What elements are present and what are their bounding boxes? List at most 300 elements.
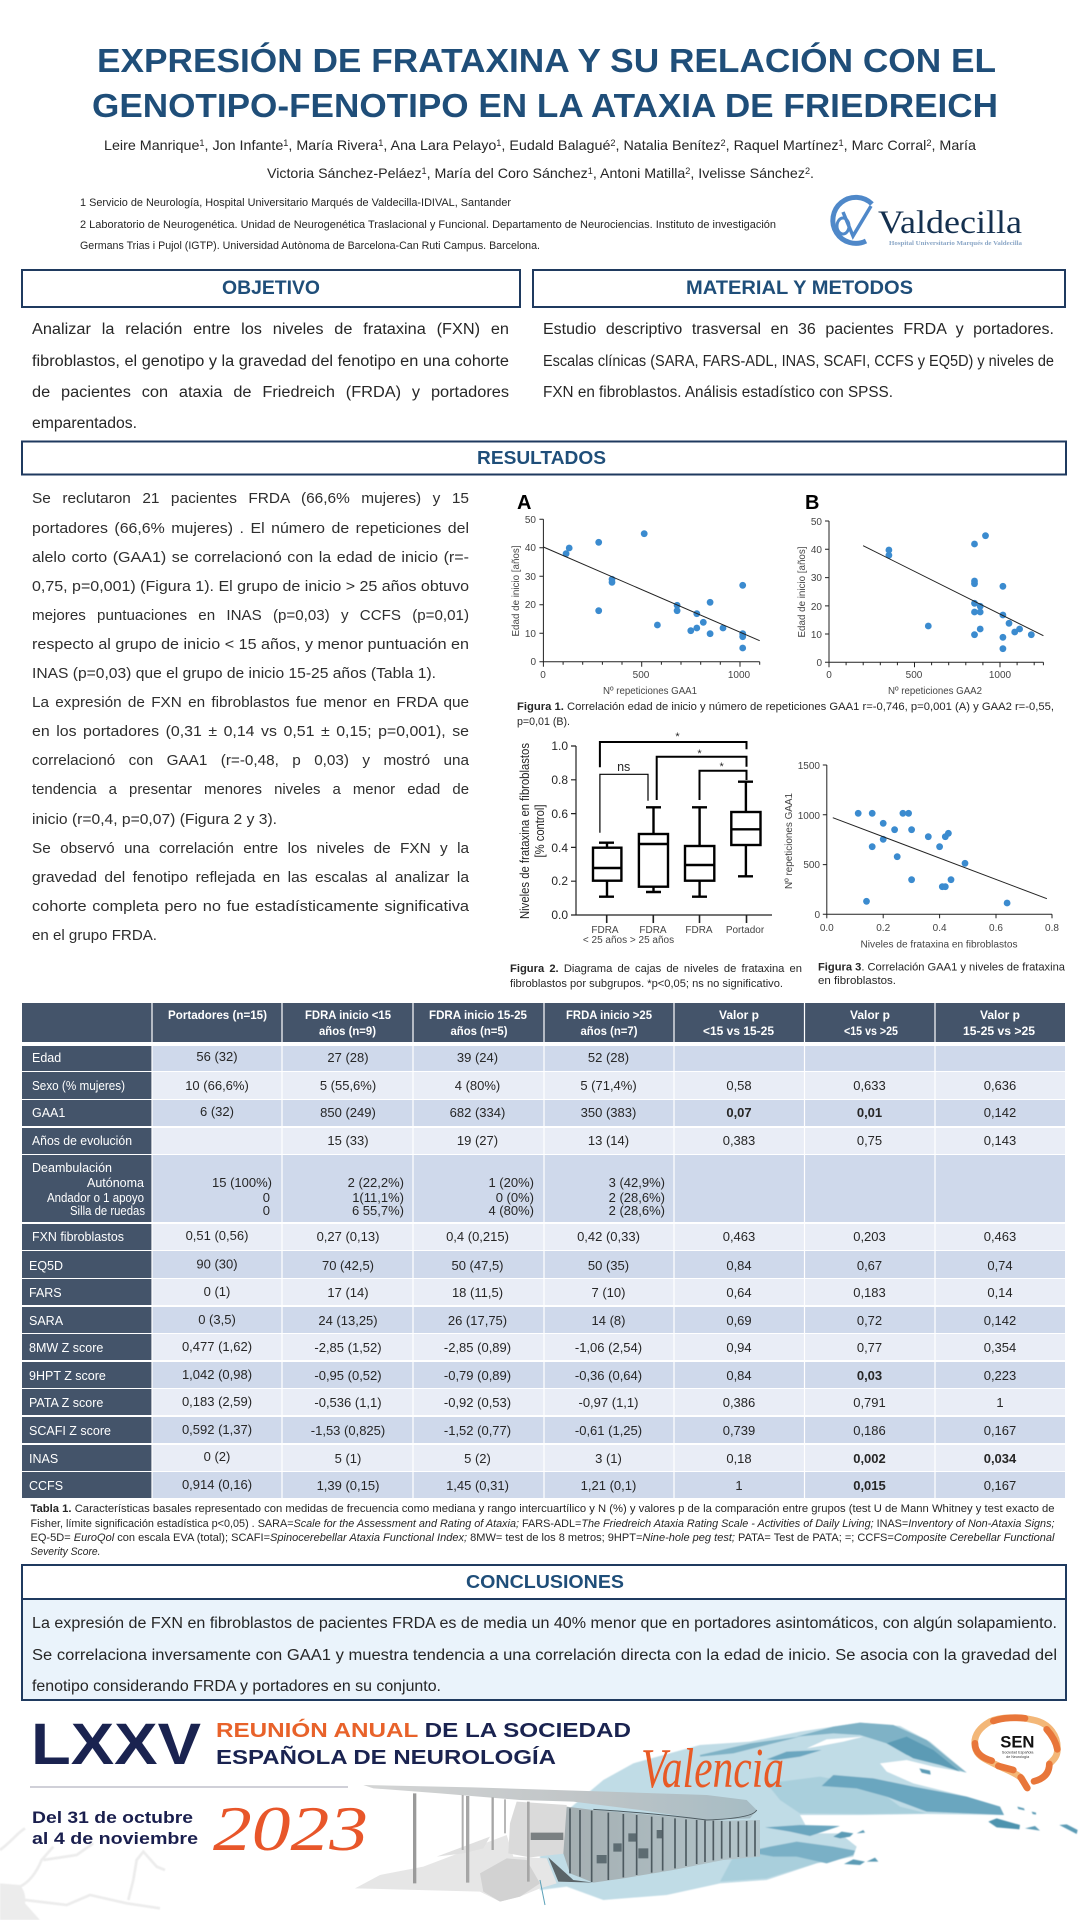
footer: meeting name: REUNIÓN ANUAL DE LA SOCIEDAD (216, 1718, 631, 1742)
row: FARS: 17 (14) (327, 1285, 369, 1300)
row: Deambulación: Autónoma (87, 1176, 144, 1190)
row: INAS: 5 (1) (335, 1451, 361, 1466)
caption: figure 1: Figura 1. Correlación edad de inicio y número de repeticiones GAA1 r=-0,746, p=0,001 (A) y GAA2 r=-0,55, (517, 701, 1054, 713)
footer: meeting name: ESPAÑOLA DE NEUROLOGÍA (216, 1746, 556, 1769)
row: EQ5D: 50 (35) (588, 1258, 629, 1273)
row: PATA Z score: 1 (996, 1395, 1004, 1410)
row: CCFS: 1,21 (0,1) (581, 1478, 636, 1493)
chart: figure 3 scatter: Niveles de frataxina en fibroblastos (860, 940, 1018, 950)
row: INAS: 5 (2) (464, 1451, 491, 1466)
caption: figure 1: p=0,01 (B). (517, 716, 570, 728)
footer: dates (32, 1809, 198, 1848)
logo: SEN: SEN (1000, 1733, 1034, 1752)
row: CCFS: 1,45 (0,31) (446, 1478, 509, 1493)
row: EQ5D: 50 (47,5) (451, 1258, 504, 1273)
text: conclusiones: La expresión de FXN en fibroblastos de pacientes FRDA es de media un 40% menor que en portadores asintomáticos, con algún solapamiento. (32, 1615, 1057, 1632)
chart: figure 3 scatter: 1500 (798, 761, 820, 772)
chart: figure 1A scatter (511, 492, 760, 697)
caption: figure 3: en fibroblastos. (818, 975, 896, 987)
caption: table 1: Tabla 1. Características basales representado con medidas de frecuencia como mediana y rango intercuartílico y N (%) y valores p de la comparación entre grupos (test U de Mann Whitney y test exacto de (30, 1503, 1054, 1515)
text: resultados: tendencia a presentar menores niveles a menor edad de (32, 781, 469, 798)
chart: figure 1A scatter: 500 (633, 670, 650, 681)
footer: gray branch wash (0, 1828, 165, 1920)
row: FARS: 0,64 (726, 1285, 752, 1300)
row: FARS: 0,183 (853, 1285, 886, 1300)
chart: figure 1A scatter: 1000 (728, 670, 751, 681)
affiliations: 2 Laboratorio de Neurogenética. Unidad de Neurogenética Traslacional y Funcional. Departamento de Neurociencias. Instituto de investigación (80, 219, 776, 231)
row: EQ5D: 0,74 (987, 1258, 1013, 1273)
chart: figure 1B scatter: B (805, 492, 819, 514)
chart: figure 1B scatter (797, 492, 1043, 697)
text: resultados: en el grupo FRDA. (32, 927, 157, 944)
caption: figure 1 (517, 701, 1054, 728)
row: Edad: 39 (24) (457, 1050, 498, 1065)
row: INAS: 0,18 (726, 1451, 752, 1466)
row: SARA (22, 1307, 1065, 1333)
row: 8MW Z score: 0,477 (1,62) (182, 1339, 252, 1354)
chart: figure 2 box plot: 0.6 (551, 807, 568, 821)
row: 8MW Z score: -1,06 (2,54) (575, 1340, 642, 1355)
row: INAS: INAS (29, 1452, 58, 1466)
row: SCAFI Z score: 0,167 (984, 1423, 1016, 1438)
text: resultados: Se observó una correlación entre los niveles de FXN y la (32, 840, 470, 857)
row: FXN fibroblastos: 0,463 (723, 1229, 755, 1244)
row: SARA: 0,69 (726, 1313, 752, 1328)
table header row: Valor p (980, 1008, 1020, 1022)
chart: figure 3 scatter: 0.8 (1045, 923, 1059, 934)
heading box: objetivo: OBJETIVO (222, 278, 320, 299)
caption: figure 2: fibroblastos por subgrupos. *p<0,05; ns no significativo. (510, 978, 783, 990)
row: EQ5D: 0,67 (857, 1258, 882, 1273)
row: PATA Z score: 0,386 (723, 1395, 755, 1410)
text: resultados: 0,75, p=0,001) (Figura 1). El grupo de inicio > 25 años obtuvo (32, 578, 469, 595)
row: FARS (22, 1279, 1065, 1305)
authors: 2 (610, 138, 616, 148)
authors: . (810, 165, 814, 181)
row: Años de evolución: 15 (33) (327, 1133, 369, 1148)
chart: figure 2 box plot: 0.0 (551, 908, 568, 922)
row: EQ5D: 0,84 (726, 1258, 752, 1273)
row: SCAFI Z score: 0,592 (1,37) (182, 1422, 252, 1437)
authors: , María (931, 137, 976, 153)
heading box: resultados (22, 442, 1066, 474)
row: Deambulación: 0 (263, 1203, 270, 1218)
chart: figure 1B scatter: Edad de inicio [años] (797, 546, 808, 638)
table header row: FDRA inicio 15-25 (429, 1008, 527, 1022)
table header row: años (n=9) (319, 1024, 376, 1038)
chart: figure 2 box plot: Portador (726, 925, 765, 936)
table header row: <15 vs 15-25 (703, 1024, 774, 1038)
row: CCFS: CCFS (29, 1479, 63, 1493)
chart: figure 1A scatter: Edad de inicio [años] (511, 545, 522, 636)
chart: figure 3 scatter: 0.0 (820, 923, 834, 934)
title: GENOTIPO-FENOTIPO EN LA ATAXIA DE FRIEDREICH (92, 87, 998, 124)
text: conclusiones: Se correlaciona inversamente con GAA1 y muestra tendencia a una correlación directa con la edad de inicio. Se asocia con la gravedad del (32, 1647, 1057, 1664)
heading box: material y metodos: MATERIAL Y METODOS (686, 278, 913, 299)
row: SCAFI Z score: -1,52 (0,77) (444, 1423, 511, 1438)
footer: LXXV: LXXV (31, 1712, 201, 1777)
authors: , Natalia Benítez (616, 137, 721, 153)
authors (104, 137, 976, 181)
text: resultados: mejores puntuaciones en INAS (p=0,03) y CCFS (p=0,01) (32, 607, 469, 624)
row: FARS: FARS (29, 1286, 62, 1300)
row: FARS: 7 (10) (592, 1285, 625, 1300)
row: SCAFI Z score: -0,61 (1,25) (575, 1423, 642, 1438)
authors: , María del Coro Sánchez (427, 165, 588, 181)
row: Deambulación: 6 55,7%) (352, 1203, 404, 1218)
row: 8MW Z score: -2,85 (0,89) (444, 1340, 511, 1355)
chart: figure 2 box plot: FDRA (685, 925, 713, 936)
table header row: FRDA inicio >25 (566, 1008, 652, 1022)
text: resultados: cohorte completa pero no fue estadísticamente significativa (32, 898, 470, 915)
row: SCAFI Z score: -1,53 (0,825) (311, 1423, 385, 1438)
row: INAS: 0,002 (853, 1451, 886, 1466)
authors: , María Rivera (288, 137, 378, 153)
chart: figure 1B scatter: 10 (811, 630, 822, 641)
row: PATA Z score: PATA Z score (29, 1396, 103, 1410)
text: resultados: alelo corto (GAA1) se correlacionó con la edad de inicio (r=- (32, 549, 469, 566)
caption: figure 3: Figura 3. Correlación GAA1 y niveles de frataxina (818, 962, 1066, 974)
authors: Leire Manrique (104, 137, 197, 153)
chart: figure 2 box plot: > 25 años (630, 935, 674, 946)
row: 9HPT Z score: 0,223 (984, 1368, 1016, 1383)
chart: figure 2 box plot: 0.2 (551, 874, 568, 888)
table: baseline characteristics (22, 1003, 1065, 1498)
row: FXN fibroblastos: 0,4 (0,215) (446, 1229, 509, 1244)
row: Edad (22, 1046, 1065, 1071)
chart: figure 2 box plot: * (720, 761, 725, 773)
footer: dates: Del 31 de octubre (32, 1809, 193, 1827)
logo: SEN: de Neurología (1006, 1755, 1030, 1759)
authors: 1 (422, 166, 427, 176)
table header row: años (n=7) (580, 1024, 638, 1038)
chart: figure 1B scatter: 500 (906, 670, 923, 681)
row: Deambulación: 2 (28,6%) (609, 1203, 665, 1218)
authors: , Raquel Martínez (726, 137, 839, 153)
row: 9HPT Z score: -0,95 (0,52) (314, 1368, 382, 1383)
text: resultados: portadores (66,6% mujeres) . El número de repeticiones del (32, 520, 469, 537)
authors: 1 (199, 138, 205, 148)
chart: figure 2 box plot: 0.4 (551, 841, 568, 855)
authors: , Ivelisse Sánchez (690, 165, 805, 181)
chart: figure 3 scatter: 0.4 (933, 923, 947, 934)
row: 9HPT Z score (22, 1362, 1065, 1388)
row: Sexo: 0,636 (984, 1078, 1016, 1093)
chart: figure 2 box plot: [% control] (533, 804, 547, 858)
row: INAS: 3 (1) (595, 1451, 622, 1466)
text: material y metodos: Estudio descriptivo trasversal en 36 pacientes FRDA y portadores. (543, 321, 1054, 338)
chart: figure 1A scatter: A (517, 492, 531, 514)
authors: , Ana Lara Pelayo (383, 137, 497, 153)
chart: figure 2 box plot: FDRA (639, 925, 667, 936)
row: Deambulación: Andador o 1 apoyo (47, 1191, 144, 1205)
row: Sexo (22, 1072, 1065, 1099)
chart: figure 2 box plot: ns (617, 760, 630, 774)
authors: 1 (588, 166, 593, 176)
chart: figure 1B scatter: 0 (816, 658, 822, 669)
row: FXN fibroblastos: 0,27 (0,13) (317, 1229, 379, 1244)
chart: figure 1B scatter: 20 (811, 602, 822, 613)
authors: 1 (496, 138, 501, 148)
chart: figure 2 box plot: 0.8 (551, 773, 568, 787)
row: GAA1: 6 (32) (200, 1104, 234, 1119)
footer: watercolor wash (540, 1723, 1078, 1900)
row: Años de evolución: 19 (27) (457, 1133, 498, 1148)
heading box: material y metodos (533, 270, 1065, 307)
chart: figure 1A scatter: 50 (525, 515, 536, 526)
table header row: Valor p (850, 1008, 890, 1022)
row: GAA1: 350 (383) (581, 1105, 636, 1120)
table header row: 15-25 vs >25 (963, 1024, 1035, 1038)
chart: figure 1A scatter: 20 (525, 600, 536, 611)
affiliations: 1 Servicio de Neurología, Hospital Universitario Marqués de Valdecilla-IDIVAL, Santander (80, 197, 511, 209)
row: Sexo: Sexo (% mujeres) (32, 1079, 125, 1093)
text: objetivo: emparentados. (32, 415, 137, 432)
row: 8MW Z score: 8MW Z score (29, 1341, 103, 1355)
row: Deambulación (22, 1155, 1065, 1222)
logo: SEN: Sociedad Española (1002, 1751, 1034, 1755)
row: PATA Z score: 0,791 (853, 1395, 886, 1410)
text: resultados: INAS (p=0,03) que el grupo de inicio 15-25 años (Tabla 1). (32, 665, 436, 682)
text: resultados: La expresión de FXN en fibroblastos fue menor en FRDA que (32, 694, 469, 711)
text: material y metodos: Escalas clínicas (SARA, FARS-ADL, INAS, SCAFI, CCFS y EQ5D) y niveles de (543, 353, 1054, 370)
footer: Valencia: Valencia (641, 1738, 784, 1800)
title (92, 42, 998, 124)
row: GAA1: 0,142 (984, 1105, 1016, 1120)
row: GAA1: GAA1 (32, 1106, 65, 1120)
row: PATA Z score: -0,536 (1,1) (314, 1395, 382, 1410)
row: 9HPT Z score: 9HPT Z score (29, 1369, 106, 1383)
caption: figure 2 (510, 963, 802, 990)
row: Deambulación: 0 (263, 1190, 270, 1205)
row: EQ5D: 70 (42,5) (322, 1258, 374, 1273)
row: INAS: 0,034 (984, 1451, 1017, 1466)
authors: , Marc Corral (844, 137, 926, 153)
text: objetivo: Analizar la relación entre los niveles de frataxina (FXN) en (32, 321, 509, 338)
text: objetivo (32, 321, 509, 432)
authors: Victoria Sánchez-Peláez (267, 165, 419, 181)
text: resultados: en los portadores (0,31 ± 0,14 vs 0,51 ± 0,15; p=0,001), se (32, 723, 469, 740)
caption: figure 3 (818, 962, 1066, 987)
authors: 2 (685, 166, 690, 176)
row: Sexo: 10 (66,6%) (185, 1078, 249, 1093)
text: conclusiones (32, 1615, 1057, 1695)
logo: Valdecilla (833, 197, 1023, 247)
chart: figure 2 box plot: Niveles de frataxina en fibroblastos (518, 743, 532, 919)
authors: , Jon Infante (205, 137, 284, 153)
panel: conclusiones (22, 1565, 1066, 1700)
table header row: FDRA inicio <15 (305, 1008, 391, 1022)
chart: figure 3 scatter: 500 (803, 860, 820, 871)
text: resultados: respecto al grupo de inicio < 15 años, y menor puntuación en (32, 636, 469, 653)
chart: figure 3 scatter (784, 761, 1059, 950)
row: Sexo: 0,633 (853, 1078, 886, 1093)
row: GAA1: 0,07 (726, 1105, 752, 1120)
row: 9HPT Z score: 1,042 (0,98) (182, 1367, 252, 1382)
row: Deambulación: 1(11,1%) (352, 1190, 404, 1205)
heading box: objetivo (22, 270, 520, 307)
row: Años de evolución: 0,383 (723, 1133, 755, 1148)
text: resultados: correlacionó con GAA1 (r=-0,48, p 0,03) y mostró una (32, 752, 470, 769)
row: FXN fibroblastos: 0,51 (0,56) (186, 1228, 248, 1243)
logo: Valdecilla: Valdecilla (878, 205, 1022, 241)
row: Años de evolución: 0,143 (984, 1133, 1016, 1148)
text: resultados (32, 490, 470, 944)
text: material y metodos: FXN en fibroblastos. Análisis estadístico con SPSS. (543, 384, 893, 401)
footer: dates: al 4 de noviembre (32, 1830, 198, 1848)
chart: figure 2 box plot: < 25 años (583, 935, 627, 946)
row: Edad: 56 (32) (196, 1049, 238, 1064)
row: SCAFI Z score: 0,186 (853, 1423, 886, 1438)
row: CCFS: 1 (735, 1478, 743, 1493)
row: FARS: 0 (1) (204, 1284, 230, 1299)
row: Años de evolución: 13 (14) (588, 1133, 629, 1148)
row: SARA: 0 (3,5) (198, 1312, 236, 1327)
row: Años de evolución: 0,75 (857, 1133, 882, 1148)
row: Deambulación: 1 (20%) (488, 1175, 534, 1190)
row: Sexo: 0,58 (726, 1078, 752, 1093)
chart: figure 3 scatter: 1000 (798, 811, 820, 822)
row: SARA: 0,72 (857, 1313, 882, 1328)
row: Deambulación: Silla de ruedas (70, 1204, 145, 1218)
caption: figure 2: Figura 2. Diagrama de cajas de niveles de frataxina en (510, 963, 802, 975)
affiliations (80, 197, 776, 252)
chart: figure 1B scatter: 0 (826, 670, 832, 681)
row: CCFS: 0,015 (853, 1478, 886, 1493)
row: Sexo: 5 (71,4%) (580, 1078, 637, 1093)
logo: Valdecilla: Hospital Universitario Marqués de Valdecilla (889, 240, 1023, 247)
row: SARA: 24 (13,25) (318, 1313, 378, 1328)
row: 8MW Z score: -2,85 (1,52) (314, 1340, 382, 1355)
row: FXN fibroblastos: 0,463 (984, 1229, 1016, 1244)
chart: figure 1B scatter: 50 (811, 517, 822, 528)
chart: figure 1B scatter: Nº repeticiones GAA2 (888, 686, 982, 697)
row: FXN fibroblastos: FXN fibroblastos (32, 1230, 124, 1244)
chart: figure 2 box plot: FDRA (591, 925, 619, 936)
row: GAA1: 850 (249) (320, 1105, 376, 1120)
row: Sexo: 5 (55,6%) (320, 1078, 376, 1093)
table header row: Valor p (719, 1008, 759, 1022)
row: CCFS: 0,167 (984, 1478, 1016, 1493)
row: Edad: Edad (32, 1051, 61, 1065)
caption: table 1: Fisher, límite significación estadística p<0,05) . SARA=Scale for the Assessment and Rating of Ataxia; FARS-ADL=The Friedreich Ataxia Rating Scale - Activities of Daily Living; INAS=Inventory of Non-Ataxia Signs; (30, 1518, 1054, 1530)
title: EXPRESIÓN DE FRATAXINA Y SU RELACIÓN CON EL (97, 42, 996, 79)
authors: 2 (805, 166, 810, 176)
chart: figure 2 box plot (518, 731, 772, 946)
row: Deambulación: 4 (80%) (488, 1203, 534, 1218)
row: CCFS: 1,39 (0,15) (317, 1478, 379, 1493)
text: resultados: Se reclutaron 21 pacientes FRDA (66,6% mujeres) y 15 (32, 490, 469, 507)
row: 9HPT Z score: -0,36 (0,64) (575, 1368, 642, 1383)
row: Sexo: 4 (80%) (455, 1078, 500, 1093)
row: FARS: 0,14 (987, 1285, 1013, 1300)
row: Edad: 52 (28) (588, 1050, 629, 1065)
row: Deambulación: 0 (0%) (496, 1190, 534, 1205)
chart: figure 1A scatter: 0 (540, 670, 546, 681)
authors: 2 (926, 138, 931, 148)
row: Deambulación: 15 (100%) (212, 1175, 272, 1190)
authors: 2 (721, 138, 726, 148)
text: resultados: gravedad del fenotipo reflejada en las escalas al analizar la (32, 869, 470, 886)
authors: 1 (839, 138, 844, 148)
authors: , Eudald Balagué (501, 137, 611, 153)
authors: 1 (283, 138, 288, 148)
row: 8MW Z score (22, 1334, 1065, 1360)
row: CCFS (22, 1472, 1065, 1498)
table header row (22, 1003, 1065, 1042)
text: resultados: inicio (r=0,4, p=0,07) (Figura 2 y 3). (32, 811, 277, 828)
authors: , Antoni Matilla (593, 165, 686, 181)
row: Edad: 27 (28) (327, 1050, 369, 1065)
text: conclusiones: fenotipo considerando FRDA y portadores en su conjunto. (32, 1678, 441, 1695)
row: FXN fibroblastos (22, 1224, 1065, 1250)
row: PATA Z score (22, 1389, 1065, 1415)
row: SARA: 26 (17,75) (448, 1313, 507, 1328)
row: EQ5D: 90 (30) (196, 1256, 238, 1272)
caption: table 1: EQ-5D= EuroQol con escala EVA (total); SCAFI=Spinocerebellar Ataxia Functional Index; 8MW= test de los 8 metros; 9HPT=Nine-hole peg test; PATA= Test de PATA; =; CCFS=Composite Cerebellar Functional (30, 1532, 1055, 1544)
row: Deambulación: 3 (42,9%) (609, 1175, 665, 1190)
chart: figure 1A scatter: 10 (525, 629, 536, 640)
row: Años de evolución (22, 1128, 1065, 1154)
logo: SEN (975, 1718, 1057, 1788)
chart: figure 2 box plot: * (675, 731, 680, 743)
caption: table 1: Severity Score. (30, 1546, 100, 1558)
table header row: <15 vs >25 (844, 1024, 898, 1038)
row: 9HPT Z score: -0,79 (0,89) (444, 1368, 511, 1383)
row: SCAFI Z score (22, 1417, 1065, 1443)
row: SARA: 0,142 (984, 1313, 1016, 1328)
row: Deambulación: 2 (28,6%) (609, 1190, 665, 1205)
row: FXN fibroblastos: 0,203 (853, 1229, 886, 1244)
row: SARA: 14 (8) (592, 1313, 625, 1328)
row: FARS: 18 (11,5) (452, 1285, 503, 1300)
row: SCAFI Z score: 0,739 (723, 1423, 755, 1438)
row: PATA Z score: -0,97 (1,1) (579, 1395, 638, 1410)
row: Años de evolución: Años de evolución (32, 1134, 132, 1148)
row: Deambulación: Deambulación (32, 1161, 112, 1175)
chart: figure 1B scatter: 40 (811, 545, 822, 556)
authors: 1 (378, 138, 383, 148)
row: INAS (22, 1445, 1065, 1471)
chart: figure 1A scatter: 30 (525, 572, 536, 583)
chart: figure 1B scatter: 30 (811, 573, 822, 584)
row: CCFS: 0,914 (0,16) (182, 1477, 252, 1492)
heading box: resultados: RESULTADOS (477, 448, 606, 468)
heading: conclusiones: CONCLUSIONES (466, 1572, 624, 1592)
chart: figure 1A scatter: Nº repeticiones GAA1 (603, 686, 697, 697)
chart: figure 3 scatter: Nº repeticiones GAA1 (784, 793, 795, 889)
chart: figure 3 scatter: 0 (814, 910, 820, 921)
caption: table 1 (30, 1503, 1055, 1558)
row: PATA Z score: -0,92 (0,53) (444, 1395, 511, 1410)
footer: year 2023: 2023 (213, 1793, 368, 1864)
chart: figure 2 box plot: 1.0 (551, 739, 568, 753)
table header row: Portadores (n=15) (168, 1008, 267, 1022)
row: SARA: SARA (29, 1314, 64, 1328)
row: 8MW Z score: 0,354 (984, 1340, 1016, 1355)
chart: figure 2 box plot: * (697, 748, 702, 760)
chart: figure 3 scatter: 0.2 (876, 923, 891, 934)
affiliations: Germans Trias i Pujol (IGTP). Universidad Autònoma de Barcelona-Can Ruti Campus. Barcelona. (80, 240, 540, 252)
footer: meeting name (216, 1718, 631, 1769)
chart: figure 1B scatter: 1000 (989, 670, 1012, 681)
row: Deambulación: 2 (22,2%) (348, 1175, 404, 1190)
row: PATA Z score: 0,183 (2,59) (182, 1394, 252, 1409)
row: GAA1: 0,01 (857, 1105, 882, 1120)
text: objetivo: fibroblastos, el genotipo y la gravedad del fenotipo en una cohorte (32, 353, 509, 370)
row: INAS: 0 (2) (204, 1449, 230, 1464)
row: 9HPT Z score: 0,84 (726, 1368, 752, 1383)
